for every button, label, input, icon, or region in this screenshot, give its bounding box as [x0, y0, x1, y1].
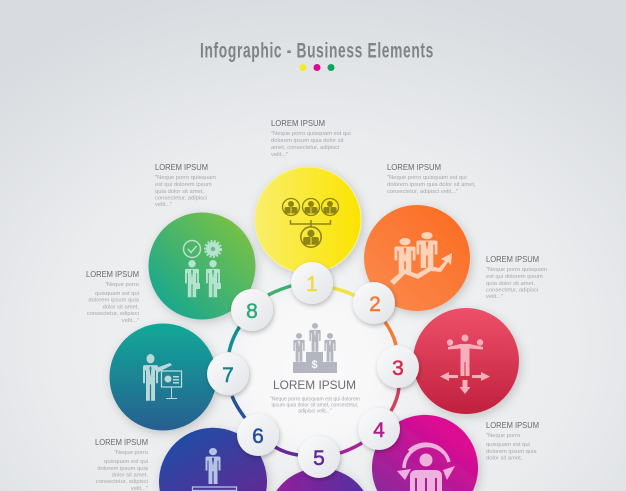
- text block 4: "Neque porro: [486, 433, 520, 439]
- number badge 8: [231, 289, 273, 331]
- text block 3: velit...": [486, 294, 503, 300]
- number badge 5: 5: [313, 447, 325, 470]
- text block 7: dolorem ipsum quia: [88, 298, 140, 304]
- text block 6: quisquam est qui: [104, 459, 148, 465]
- text block 7: [86, 269, 140, 324]
- text block 3: [486, 254, 547, 300]
- text block 7: "Neque porro: [105, 282, 139, 288]
- center text: LOREM IPSUM: [273, 378, 356, 392]
- text block 4: dolor sit amet,: [486, 456, 523, 462]
- text block 6: [95, 437, 149, 491]
- icon: team hierarchy: [282, 198, 338, 247]
- number badge 6: [237, 414, 279, 456]
- number badge 3: [377, 346, 419, 388]
- text block 6: LOREM IPSUM: [95, 437, 148, 447]
- big circle 7: [110, 324, 216, 430]
- text block 7: consectetur, adipisci: [87, 311, 139, 317]
- text block 8: consectetur, adipisci: [155, 196, 207, 202]
- text block 8: "Neque porro quisquam: [155, 175, 216, 181]
- number badge 2: [353, 282, 395, 324]
- big circle 6: [159, 428, 267, 491]
- center podium icon: $: [311, 359, 318, 371]
- text block 4: quisquam est qui: [486, 442, 530, 448]
- center text: adipisci velit...": [298, 408, 332, 414]
- text block 1: amet, consectetur, adipisci: [271, 145, 339, 151]
- center text: "Neque porro quisquam est qui dolorem: [270, 396, 360, 402]
- text block 2: "Neque porro quisquam est qui: [387, 175, 467, 181]
- text block 8: LOREM IPSUM: [155, 162, 208, 172]
- text block 3: est qui dolorem ipsum: [486, 274, 543, 280]
- text block 3: LOREM IPSUM: [486, 254, 539, 264]
- big circle 2: [364, 205, 470, 311]
- big circle 4: [372, 415, 478, 491]
- text block 4: LOREM IPSUM: [486, 420, 539, 430]
- number badge 7: 7: [222, 364, 234, 387]
- number badge 1: 1: [306, 273, 318, 296]
- center disc: [229, 284, 401, 456]
- number badge 7: [207, 353, 249, 395]
- icon: growth team: [390, 232, 452, 285]
- big circle 5: [276, 468, 364, 491]
- text block 7: LOREM IPSUM: [86, 269, 139, 279]
- text block 7: quisquam est qui: [95, 291, 139, 297]
- number badge 3: 3: [392, 357, 404, 380]
- center text: [270, 378, 360, 414]
- number badge 4: 4: [373, 419, 385, 442]
- text block 4: dolorem ipsum quia: [486, 449, 537, 455]
- number badge 1: [291, 262, 333, 304]
- icon: presenter on stage: [192, 448, 236, 490]
- number badge 4: [358, 408, 400, 450]
- text block 1: velit...": [271, 152, 288, 158]
- text block 8: [155, 162, 216, 208]
- text block 2: LOREM IPSUM: [387, 162, 441, 172]
- text block 6: dolor sit amet,: [112, 472, 148, 478]
- text block 3: "Neque porro quisquam: [486, 267, 547, 273]
- text block 6: consectetur, adipisci: [96, 479, 148, 485]
- text block 2: consectetur, adipisci velit...": [387, 189, 458, 195]
- text block 2: dolorem ipsum quia dolor sit amet,: [387, 182, 476, 188]
- text block 4: [486, 420, 539, 462]
- big circle 1: [255, 167, 361, 273]
- text block 2: [387, 162, 476, 195]
- text block 1: dolorem ipsum quia dolor sit: [271, 138, 344, 144]
- text block 1: "Neque porro quisquam est qui: [271, 131, 351, 137]
- center text: ipsum quia dolor sit amet, consectetur,: [272, 402, 358, 408]
- text block 8: est qui dolorem ipsum: [155, 182, 212, 188]
- number badge 5: [298, 436, 340, 478]
- icon: thinking businessmen: [184, 240, 221, 297]
- number badge 6: 6: [252, 425, 264, 448]
- title dots: [300, 64, 334, 71]
- big circle 8: [148, 212, 256, 320]
- number badge 2: 2: [369, 293, 381, 316]
- icon: decision arrows: [440, 334, 490, 394]
- text block 6: dolorem ipsum quia: [97, 466, 149, 472]
- icon: cycle team: [397, 444, 455, 491]
- title: Infographic - Business Elements: [200, 40, 434, 62]
- text block 7: velit...": [122, 318, 139, 324]
- number badge 8: 8: [246, 300, 258, 323]
- text block 6: "Neque porro: [114, 450, 148, 456]
- icon: presenter with chart: [143, 354, 182, 401]
- center podium icon: [293, 323, 337, 373]
- text block 7: dolor sit amet,: [103, 304, 139, 310]
- ring segments: [229, 285, 399, 455]
- text block 1: [271, 118, 351, 158]
- text block 1: LOREM IPSUM: [271, 118, 325, 128]
- big circle 3: [413, 308, 519, 414]
- text block 8: velit...": [155, 202, 172, 208]
- text block 3: quia dolor sit amet,: [486, 281, 535, 287]
- text block 8: quia dolor sit amet,: [155, 189, 204, 195]
- text block 3: consectetur, adipisci: [486, 288, 538, 294]
